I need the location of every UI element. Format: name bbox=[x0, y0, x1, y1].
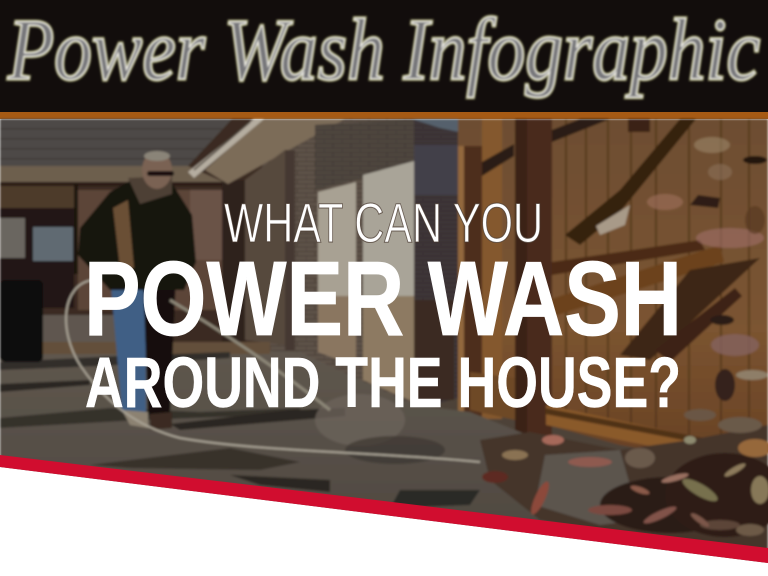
soffit and gutter bbox=[188, 119, 345, 184]
header band bbox=[0, 0, 768, 112]
pavement bbox=[0, 342, 640, 560]
leaf pile bbox=[480, 315, 768, 560]
headline bbox=[84, 191, 682, 423]
headline line 1: WHAT CAN YOU bbox=[224, 191, 543, 254]
house left bbox=[0, 119, 300, 359]
black bin bbox=[0, 280, 43, 362]
wooden fence bbox=[458, 119, 768, 470]
red diagonal band bbox=[0, 455, 768, 563]
white base bbox=[0, 467, 768, 576]
orange divider bar bbox=[0, 112, 768, 119]
background photo: man power washing beside a fence bbox=[0, 119, 768, 564]
dark brick column bbox=[412, 119, 490, 410]
pressure hose and wand bbox=[66, 280, 480, 462]
photo base fill bbox=[0, 119, 768, 564]
brick wall bbox=[245, 119, 415, 410]
white wall panels bbox=[318, 161, 414, 402]
man with pressure washer bbox=[78, 151, 196, 430]
